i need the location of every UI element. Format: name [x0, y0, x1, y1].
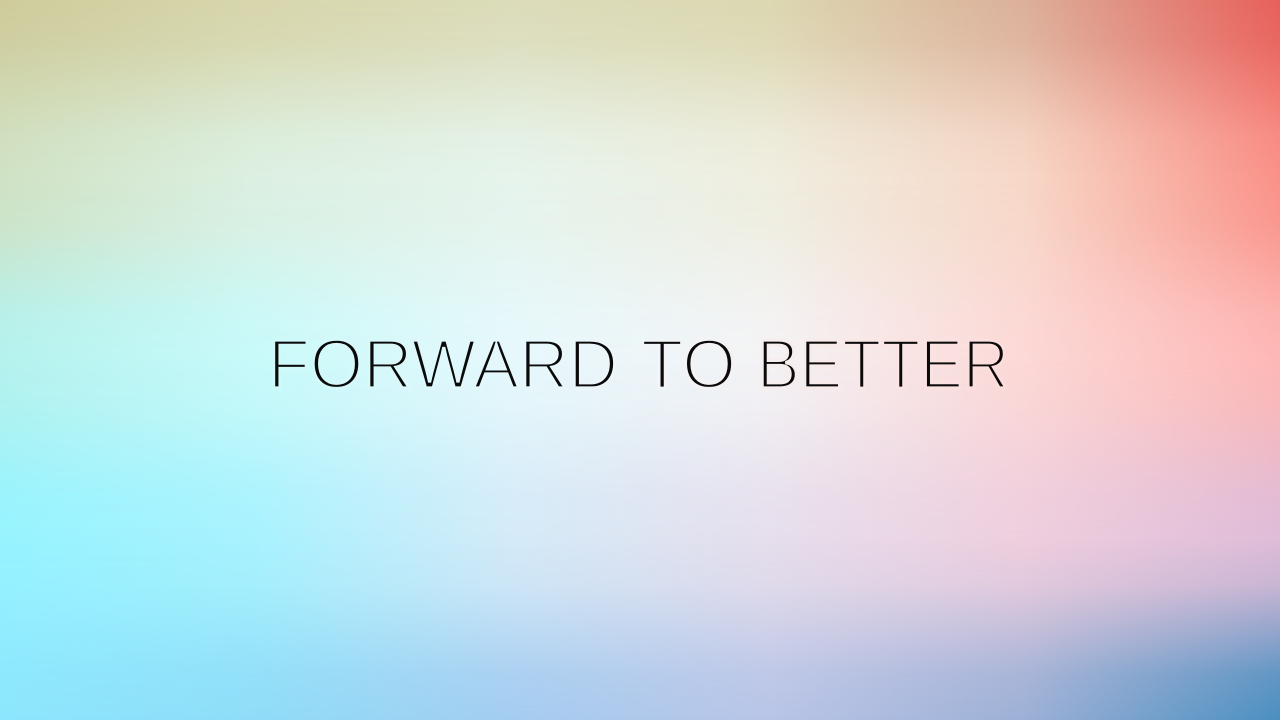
- title: [268, 325, 1009, 403]
- title: FORWARD: [268, 325, 618, 403]
- title: BETTER: [757, 325, 1009, 403]
- title: TO: [641, 325, 736, 403]
